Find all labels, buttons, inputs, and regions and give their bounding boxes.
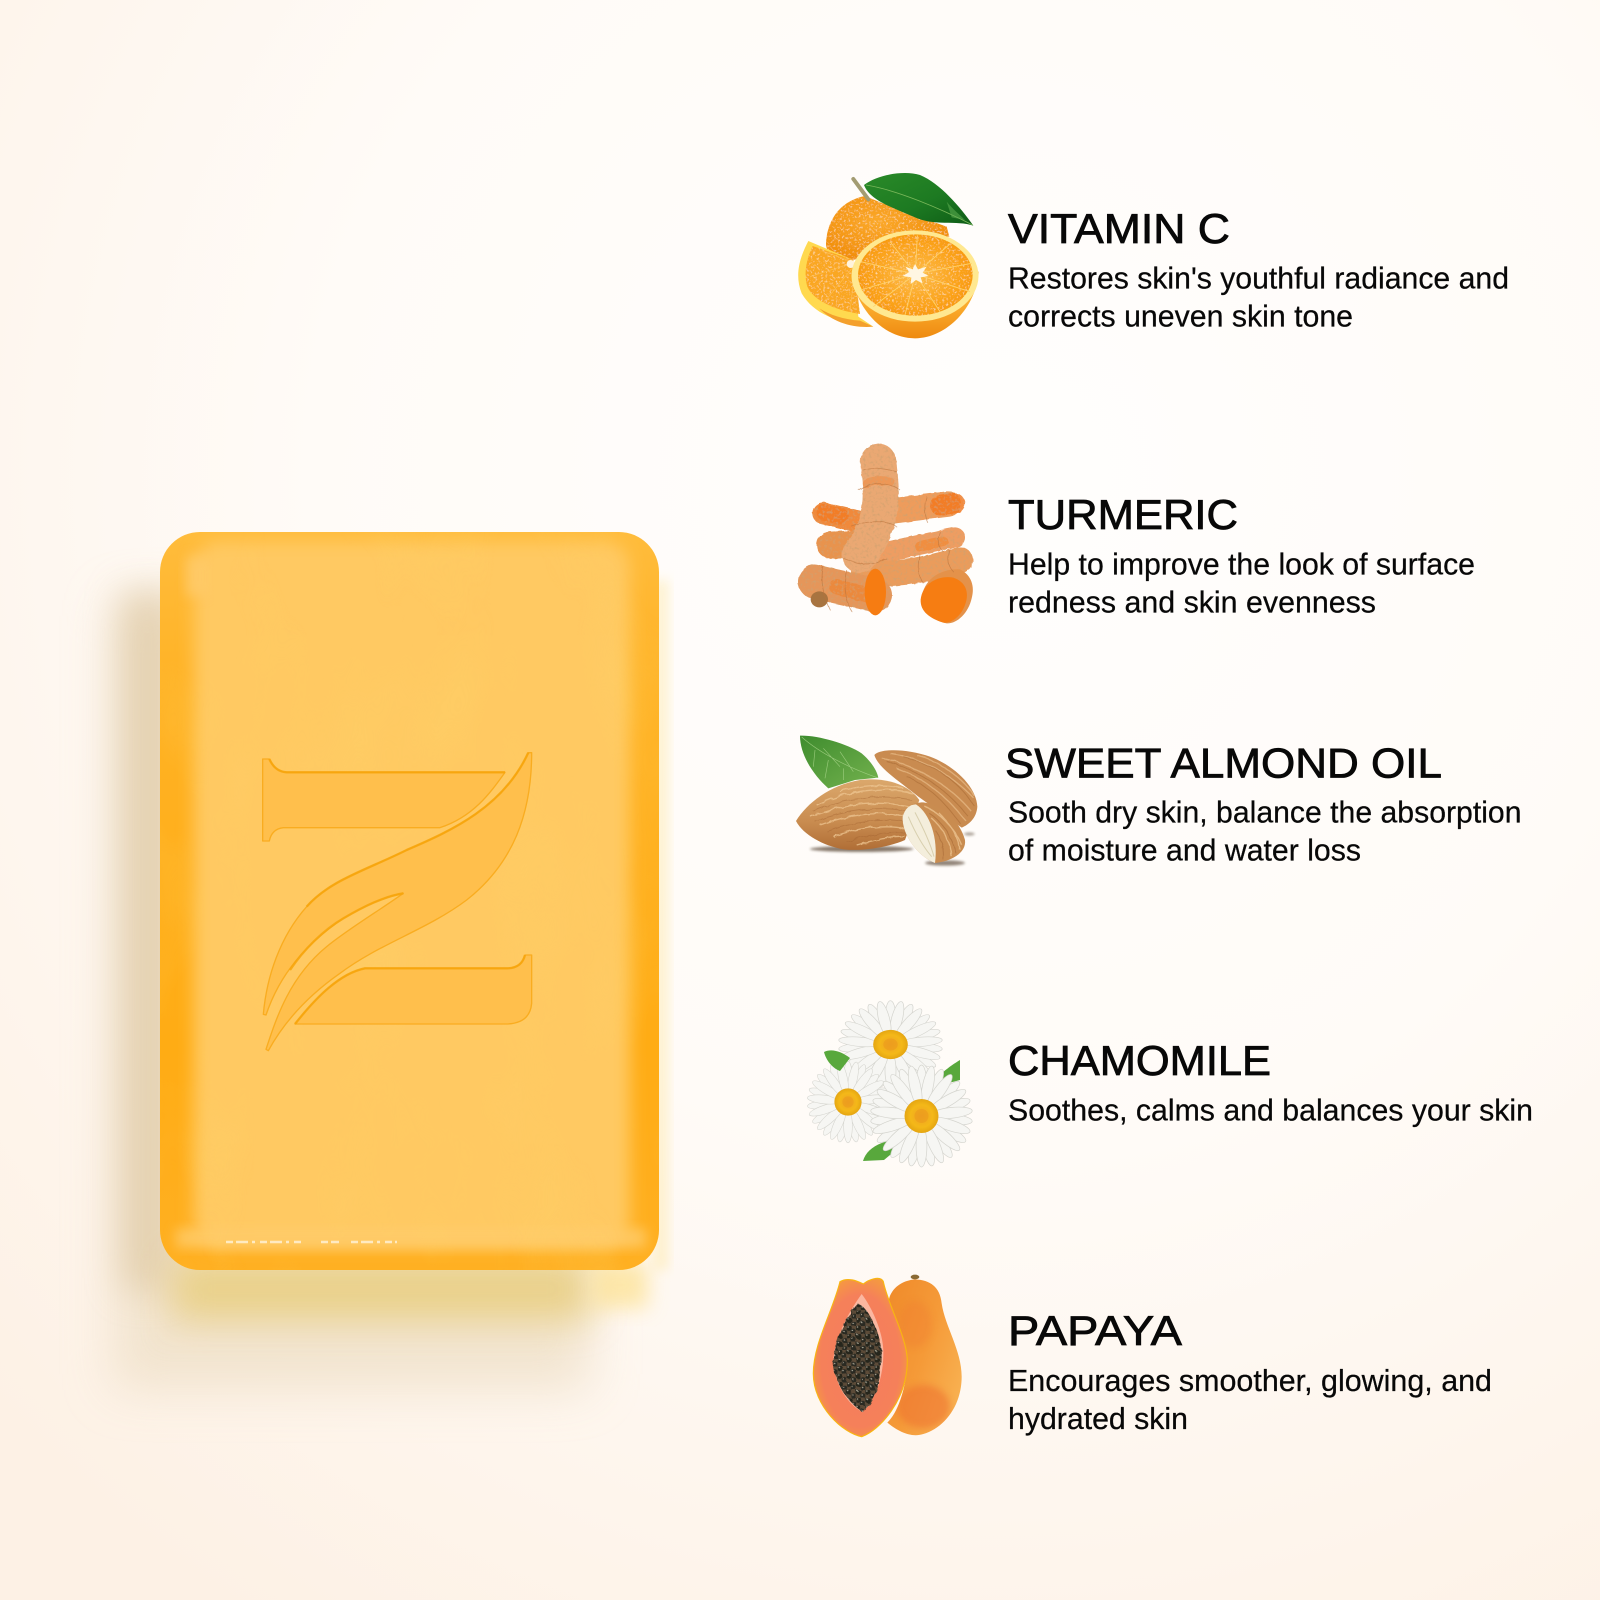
soap shadow [112, 580, 668, 1390]
heading: turmeric: TURMERIC [1008, 491, 1238, 538]
embossed Z logo [263, 753, 532, 1051]
soap body [160, 532, 659, 1270]
icon: chamomile flowers [807, 1001, 973, 1167]
description: papaya: Encourages smoother, glowing, and [1008, 1363, 1492, 1398]
heading: vitamin c: VITAMIN C [1008, 205, 1230, 252]
icon: turmeric root [811, 462, 973, 623]
description: papaya: hydrated skin [1008, 1401, 1188, 1436]
icon: almonds [796, 736, 977, 866]
description: vitamin c: Restores skin's youthful radiance and [1008, 260, 1509, 296]
description: chamomile: Soothes, calms and balances your skin [1008, 1092, 1533, 1128]
description: sweet almond oil: of moisture and water loss [1008, 832, 1361, 868]
panel: turmeric [811, 462, 1475, 623]
icon: orange [798, 173, 979, 338]
panel: vitamin c [798, 173, 1509, 338]
soap bar with shadow and embossed logo [112, 532, 668, 1390]
panel: sweet almond oil [796, 736, 1522, 868]
icon: papaya [813, 1275, 962, 1437]
heading: chamomile: CHAMOMILE [1008, 1037, 1271, 1084]
description: sweet almond oil: Sooth dry skin, balance the absorption [1008, 794, 1522, 830]
panel: papaya [813, 1275, 1492, 1437]
description: vitamin c: corrects uneven skin tone [1008, 298, 1353, 334]
heading: sweet almond oil: SWEET ALMOND OIL [1005, 740, 1442, 786]
description: turmeric: Help to improve the look of surface [1008, 546, 1475, 582]
heading: papaya: PAPAYA [1008, 1307, 1182, 1354]
panel: chamomile [807, 1001, 1533, 1167]
description: turmeric: redness and skin evenness [1008, 584, 1376, 620]
